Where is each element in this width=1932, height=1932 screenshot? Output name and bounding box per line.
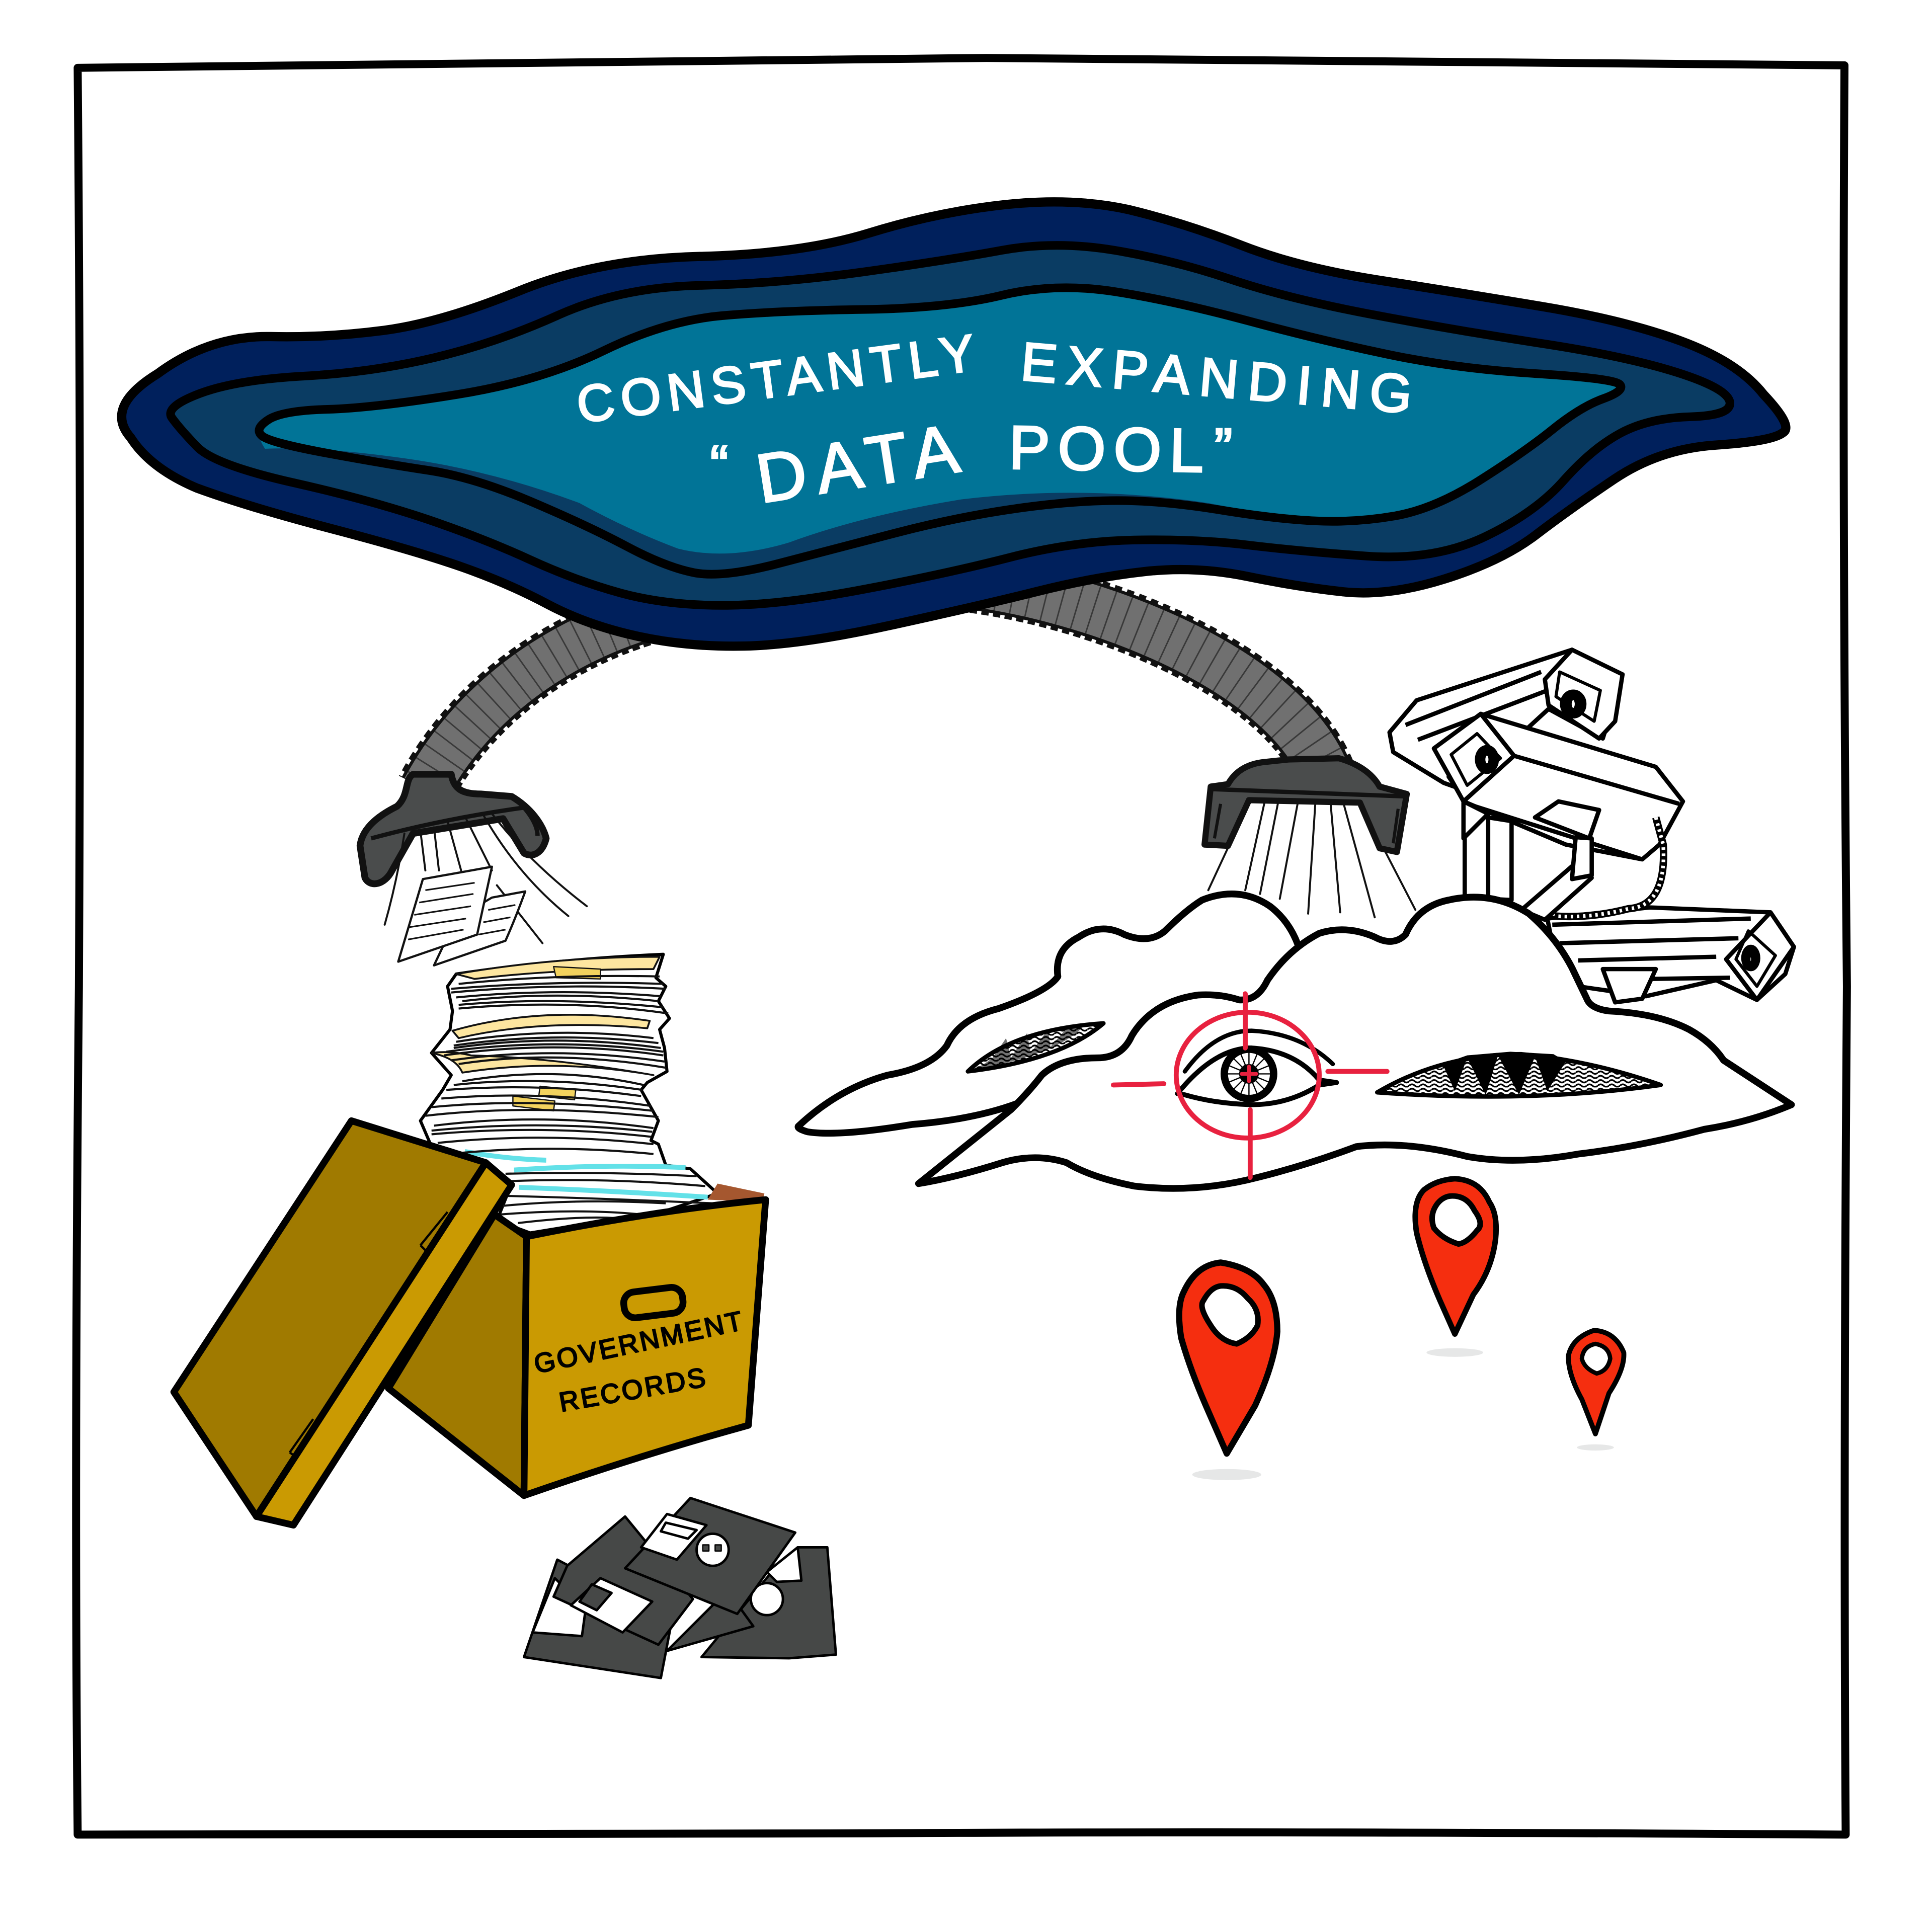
box: label: GOVERNMENT <box>531 1306 745 1380</box>
front cloud <box>919 897 1792 1188</box>
data pool <box>122 202 1786 646</box>
camera face <box>1434 714 1514 801</box>
archive box <box>174 1121 766 1525</box>
bracket plate <box>1535 801 1599 838</box>
floppy: top <box>625 1498 795 1614</box>
floppy disks <box>524 1498 836 1678</box>
cloud with hidden face <box>798 894 1792 1188</box>
location pin: small <box>1568 1330 1624 1451</box>
pool title <box>573 324 1414 518</box>
camera: top <box>1390 650 1623 789</box>
eye brow and lids <box>1185 1031 1333 1072</box>
pool title: POOL <box>1008 413 1204 485</box>
floppy: left top <box>553 1516 693 1645</box>
camera body <box>1448 714 1683 859</box>
cable <box>1555 818 1663 917</box>
box: brown inner corner <box>708 1184 764 1202</box>
paper stack <box>421 954 717 1233</box>
mount legs <box>1465 814 1511 900</box>
pool title: DATA <box>751 410 964 518</box>
iris <box>1224 1049 1273 1098</box>
location pin: medium <box>1415 1179 1496 1357</box>
sticky tabs <box>513 967 600 1111</box>
pool: outer layer <box>122 202 1786 646</box>
vacuum nozzle: left <box>360 774 546 884</box>
box: label <box>531 1306 745 1418</box>
floppy: middle <box>667 1590 753 1651</box>
lid: handles <box>290 1212 448 1456</box>
suction rays: right <box>1209 800 1415 917</box>
pool: inner water patch <box>260 288 1621 553</box>
box: front face <box>524 1199 766 1496</box>
lid: top face <box>174 1121 486 1516</box>
pool title: “ <box>710 434 728 495</box>
back cloud <box>798 894 1302 1133</box>
location pin: large <box>1179 1262 1277 1480</box>
lid: edge <box>257 1163 512 1525</box>
box: label: RECORDS <box>557 1362 708 1418</box>
pool: inner outline <box>259 288 1621 574</box>
hose: right <box>949 580 1325 774</box>
pool title: CONSTANTLY <box>573 324 978 434</box>
suction rays: left <box>385 814 587 943</box>
sheet lines <box>425 976 712 1223</box>
box: side face <box>388 1215 526 1496</box>
pool: middle layer <box>171 246 1730 605</box>
camera: lower right <box>1547 908 1794 1002</box>
large mouth <box>1377 1052 1661 1096</box>
floppy: bottom left <box>524 1560 672 1678</box>
box: handle hole <box>622 1286 684 1319</box>
camera: middle with mount and cable <box>1434 714 1683 920</box>
yellow folders <box>456 957 660 979</box>
red crosshair target <box>1113 994 1387 1177</box>
pool title: ” <box>1215 417 1233 477</box>
vacuum nozzle: right <box>1204 758 1407 852</box>
pool title: EXPANDING <box>1019 331 1414 425</box>
flying papers <box>398 867 525 965</box>
small mouth <box>968 1023 1103 1072</box>
mount bracket <box>1521 863 1592 920</box>
hose: left <box>425 610 666 789</box>
floppy: right <box>701 1547 836 1658</box>
cyan sheets <box>465 1152 708 1197</box>
stack body <box>421 954 717 1233</box>
